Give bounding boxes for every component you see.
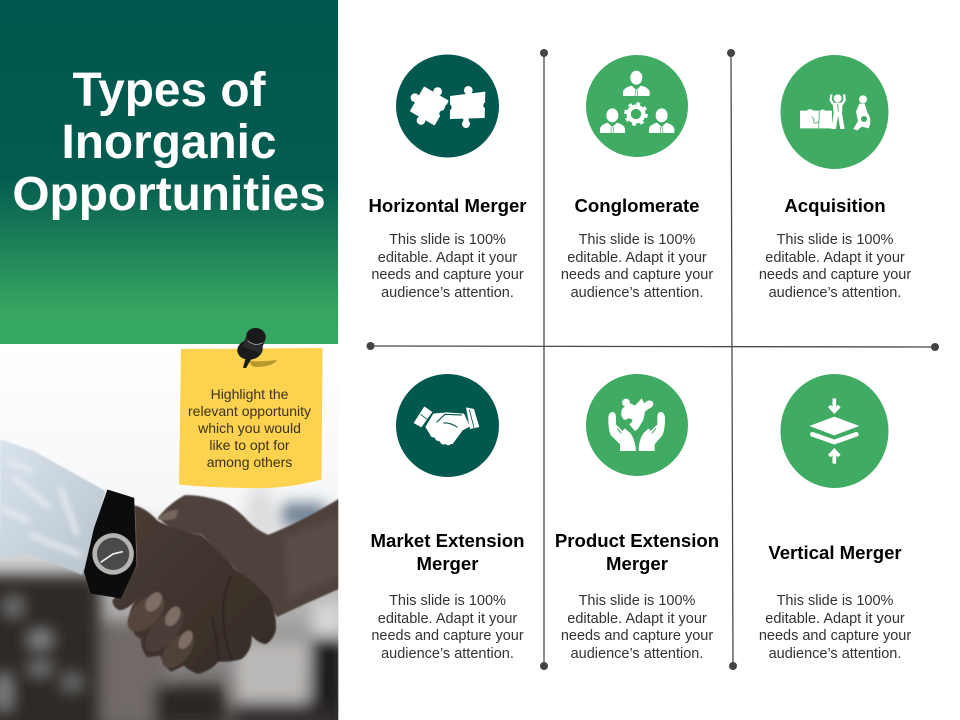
text: vertical merger: audience’s attention. — [769, 646, 901, 662]
text: product extension merger — [561, 593, 713, 662]
icon: hands holding puzzle — [586, 374, 688, 476]
heading: product extension merger — [555, 530, 719, 574]
text: product extension merger: audience’s attention. — [571, 646, 703, 662]
text: vertical merger — [759, 593, 911, 662]
heading: vertical merger: Vertical Merger — [768, 542, 902, 563]
icon: merging layers — [780, 374, 888, 488]
text: product extension merger: editable. Adapt it your — [567, 611, 707, 627]
text: market extension merger: editable. Adapt it your — [378, 611, 517, 627]
text: market extension merger: audience’s attention. — [381, 646, 514, 662]
text: horizontal merger — [371, 232, 524, 301]
text: conglomerate: needs and capture your — [561, 267, 713, 283]
text: market extension merger — [371, 593, 524, 662]
sticky note text: like to opt for — [209, 437, 290, 453]
sticky note text: Highlight the — [211, 386, 288, 402]
text: product extension merger: needs and capture your — [561, 628, 713, 644]
text: horizontal merger: audience’s attention. — [381, 285, 514, 301]
heading: market extension merger: Market Extension — [371, 530, 524, 551]
text: market extension merger: needs and capture your — [371, 628, 524, 644]
left green title panel — [0, 0, 338, 344]
text: conglomerate: This slide is 100% — [579, 232, 695, 248]
icon: team and gear — [586, 55, 688, 157]
text: market extension merger: This slide is 100% — [389, 593, 506, 609]
text: conglomerate: editable. Adapt it your — [567, 250, 707, 266]
title — [12, 64, 326, 221]
sticky note text: relevant opportunity — [188, 403, 311, 419]
heading: conglomerate: Conglomerate — [574, 195, 700, 216]
text: vertical merger: This slide is 100% — [777, 593, 893, 609]
icon: puzzle pieces — [396, 54, 499, 158]
text: horizontal merger: needs and capture your — [371, 267, 524, 283]
text: acquisition: editable. Adapt it your — [765, 250, 905, 266]
text: acquisition — [759, 232, 911, 301]
text: vertical merger: needs and capture your — [759, 628, 911, 644]
push pin — [236, 326, 278, 368]
text: horizontal merger: This slide is 100% — [389, 232, 506, 248]
heading: product extension merger: Merger — [606, 553, 668, 574]
text: conglomerate — [561, 232, 713, 301]
text: acquisition: audience’s attention. — [769, 285, 901, 301]
sticky note text: among others — [207, 454, 292, 470]
title: Inorganic — [61, 116, 277, 169]
title: Opportunities — [12, 168, 326, 221]
text: conglomerate: audience’s attention. — [571, 285, 703, 301]
text: product extension merger: This slide is 100% — [579, 593, 695, 609]
heading: market extension merger — [371, 530, 524, 574]
sticky note text: which you would — [198, 420, 301, 436]
title: Types of — [72, 64, 265, 117]
right arm and hand — [158, 495, 340, 617]
text: acquisition: needs and capture your — [759, 267, 911, 283]
text: vertical merger: editable. Adapt it your — [765, 611, 905, 627]
handshake photo — [0, 438, 338, 720]
heading: market extension merger: Merger — [416, 553, 478, 574]
text: acquisition: This slide is 100% — [777, 232, 893, 248]
heading: horizontal merger: Horizontal Merger — [368, 195, 527, 216]
heading: product extension merger: Product Extension — [555, 530, 719, 551]
vertical divider 2 — [727, 49, 737, 670]
text: horizontal merger: editable. Adapt it your — [378, 250, 517, 266]
heading: acquisition: Acquisition — [784, 195, 886, 216]
sticky note — [179, 348, 322, 488]
horizontal divider — [366, 342, 939, 351]
wristwatch — [84, 489, 137, 599]
icon: handshake — [396, 374, 499, 477]
left hand and fingers — [112, 505, 276, 674]
shirt sleeve — [0, 439, 106, 575]
vertical divider 1 — [540, 49, 548, 670]
sticky note text — [188, 386, 311, 470]
icon: acquisition — [780, 55, 888, 169]
